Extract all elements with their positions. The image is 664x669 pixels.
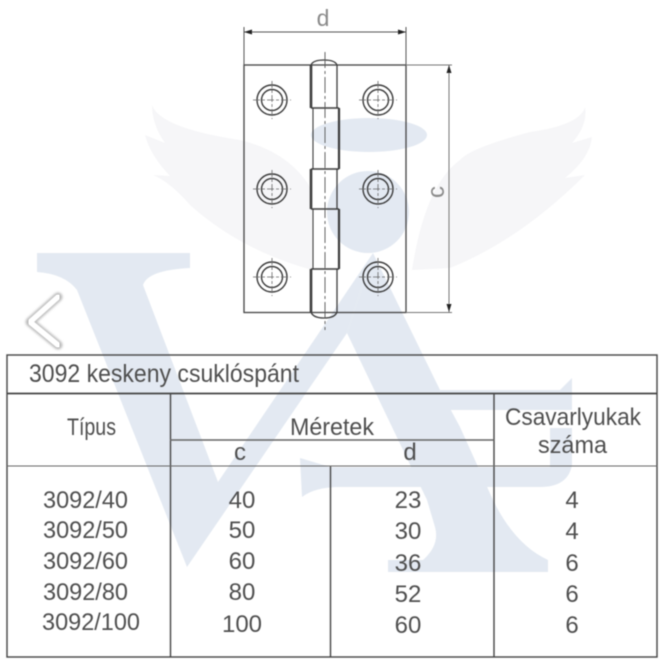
dimension d [244, 5, 406, 65]
column: type values [42, 487, 140, 636]
watermark: right wing [412, 107, 592, 270]
data table [7, 355, 657, 657]
column: c values: 100 [222, 611, 262, 638]
column header: dimensions: Méretek [290, 414, 375, 441]
table title: 3092 keskeny csuklóspánt [29, 360, 299, 388]
column: type values: 3092/60 [43, 548, 128, 575]
column: c values: 80 [229, 579, 255, 606]
column header: screw holes: Csavarlyukak [505, 404, 642, 431]
column: d values: 23 [395, 487, 421, 514]
column: type values: 3092/40 [43, 487, 128, 514]
column: screw hole counts: 6 [565, 612, 579, 639]
column: type values: 3092/50 [43, 517, 128, 544]
watermark: V and A letterform [37, 253, 572, 572]
table grid [7, 355, 657, 657]
column: screw hole counts: 6 [565, 581, 579, 608]
dimension c: c [423, 186, 450, 198]
column: screw hole counts [565, 487, 579, 639]
column: type values: 3092/80 [43, 579, 128, 606]
dimension c [406, 65, 452, 312]
hinge plate outline [244, 65, 406, 312]
sub header d: d [403, 439, 417, 466]
hinge technical drawing [244, 5, 452, 330]
column header: type: Típus [67, 414, 116, 441]
hinge pin and knuckles [311, 52, 339, 330]
sub header c: c [234, 439, 246, 466]
column: c values: 50 [229, 517, 255, 544]
column: screw hole counts: 4 [565, 518, 579, 545]
column: c values [222, 487, 262, 638]
watermark: ellipse [311, 118, 427, 152]
dimension d: d [317, 5, 329, 31]
column header: screw holes [505, 404, 642, 459]
column: d values: 60 [395, 612, 421, 639]
column: d values [395, 487, 421, 639]
watermark: left wing [145, 105, 312, 270]
screw holes [253, 81, 397, 296]
column: type values: 3092/100 [42, 609, 140, 636]
column: screw hole counts: 4 [565, 487, 579, 514]
column header: screw holes: száma [538, 432, 608, 459]
column: c values: 60 [229, 548, 255, 575]
watermark: circle [327, 171, 409, 253]
watermark logo [37, 105, 592, 572]
column: d values: 30 [395, 518, 421, 545]
column: c values: 40 [229, 487, 255, 514]
column: d values: 52 [395, 581, 421, 608]
column: screw hole counts: 6 [565, 550, 579, 577]
back chevron [30, 297, 58, 345]
column: d values: 36 [395, 550, 421, 577]
